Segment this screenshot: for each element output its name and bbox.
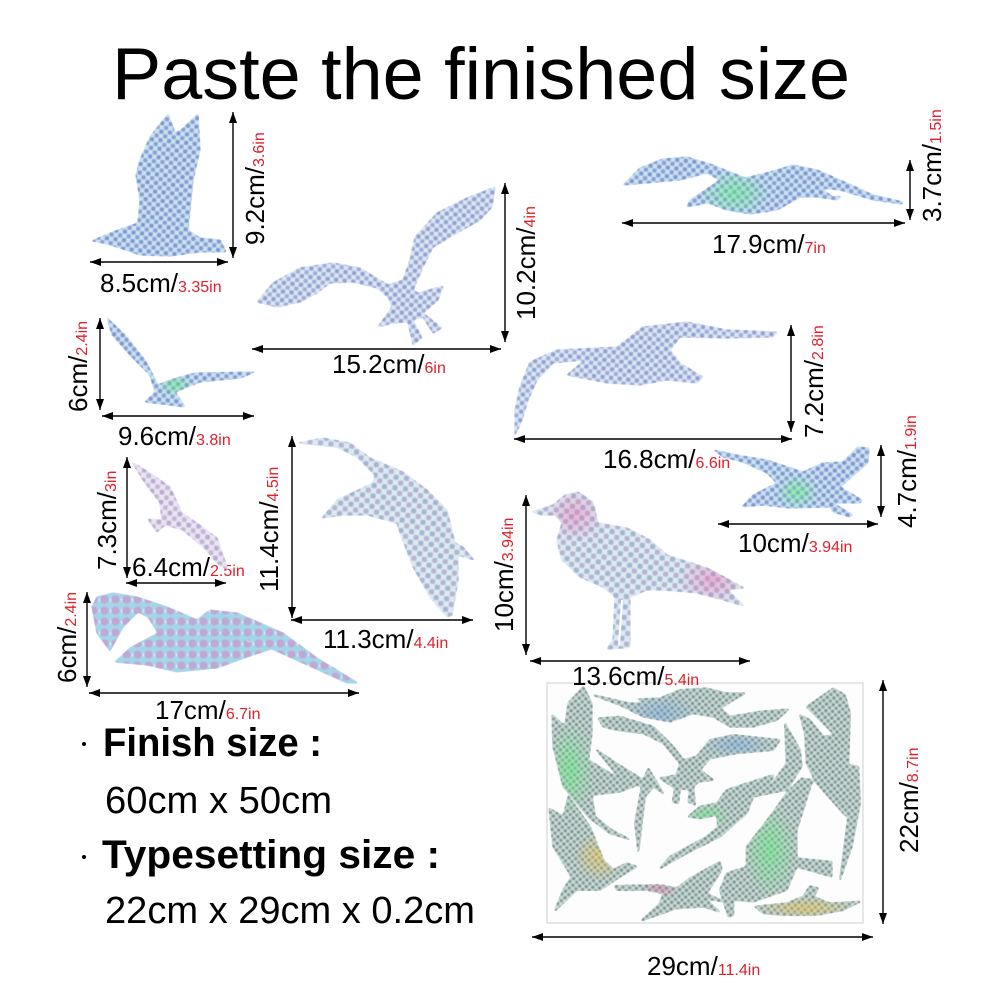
height label: 7.2cm/2.8in [799, 325, 829, 438]
width arrow [89, 692, 359, 694]
typesetting size value: 22cm x 29cm x 0.2cm [105, 890, 475, 932]
panel: sticker 10cm by 4.7cm [714, 415, 922, 558]
finish size value: 60cm x 50cm [105, 780, 332, 822]
text block: typesetting size [82, 833, 475, 932]
bird shape [714, 447, 869, 517]
bird shape [298, 438, 474, 617]
leg gap [619, 600, 622, 645]
green sheen [778, 476, 816, 508]
height arrow [232, 112, 234, 258]
height arrow [291, 436, 293, 618]
pink sheen [550, 493, 740, 600]
bullet [82, 742, 86, 746]
height arrow [99, 318, 101, 410]
width label: 8.5cm/3.35in [100, 268, 222, 298]
width label: 11.3cm/4.4in [323, 624, 448, 654]
height label: 6cm/2.4in [52, 592, 82, 683]
width label: 9.6cm/3.8in [118, 421, 231, 451]
width label: 10cm/3.94in [738, 528, 852, 558]
height label: 4.7cm/1.9in [892, 415, 922, 528]
width arrow [530, 660, 750, 662]
green sheen [160, 376, 190, 396]
height label: 6cm/2.4in [63, 321, 93, 412]
width arrow [291, 619, 473, 621]
width label: 15.2cm/6in [332, 349, 446, 379]
height label: 22cm/8.7in [894, 747, 924, 853]
panel: sticker 9.6cm by 6cm [63, 318, 255, 451]
width arrow [514, 438, 792, 440]
panel: sticker 8.5cm by 9.2cm [90, 112, 270, 298]
width label: 16.8cm/6.6in [603, 444, 730, 474]
height label: 9.2cm/3.6in [240, 132, 270, 245]
height arrow [86, 592, 88, 687]
height arrow [882, 680, 884, 924]
bird shape [257, 187, 495, 345]
height label: 10cm/3.94in [489, 518, 519, 632]
height arrow [909, 160, 911, 220]
width label: 29cm/11.4in [647, 951, 760, 981]
width arrow [532, 936, 873, 938]
bird shape [107, 318, 255, 407]
bullet [82, 855, 86, 859]
width label: 13.6cm/5.4in [572, 661, 699, 691]
sheet backing [547, 683, 863, 923]
width arrow [252, 348, 501, 350]
width label: 17cm/6.7in [155, 695, 261, 725]
panel: standing gull sticker 13.6cm by 10cm [489, 489, 750, 691]
bird shape [92, 114, 226, 256]
panel: sticker 15.2cm by 10.2cm [252, 183, 541, 379]
width arrow [90, 261, 228, 263]
panel: sticker 6.4cm by 7.3cm [92, 457, 245, 583]
bird shape [623, 157, 903, 214]
sheet sheens [547, 693, 857, 920]
height arrow [504, 183, 506, 342]
title: Paste the finished size [112, 34, 850, 115]
height label: 10.2cm/4in [511, 206, 541, 320]
panel: sticker 17cm by 6cm [52, 592, 359, 725]
bird shape [532, 492, 744, 649]
typesetting size heading: Typesetting size : [102, 833, 440, 877]
width arrow [102, 415, 254, 417]
width arrow [126, 582, 226, 584]
panel: sticker 11.3cm by 11.4cm [254, 436, 474, 654]
sheet birds [549, 687, 860, 921]
width label: 17.9cm/7in [712, 229, 826, 259]
panel: sticker 16.8cm by 7.2cm [514, 322, 829, 474]
width arrow [622, 222, 905, 224]
height arrow [126, 457, 128, 578]
height arrow [880, 445, 882, 517]
green sheen [704, 172, 766, 212]
bird shape [515, 322, 777, 435]
height arrow [525, 495, 527, 655]
finish size heading: Finish size : [103, 721, 322, 765]
panel: sticker 17.9cm by 3.7cm [622, 109, 947, 259]
height label: 11.4cm/4.5in [254, 467, 284, 592]
panel: sheet of stickers 29cm by 22cm [532, 680, 924, 981]
height label: 7.3cm/3in [92, 471, 122, 570]
bird shape [132, 462, 228, 570]
width label: 6.4cm/2.5in [132, 552, 245, 582]
height label: 3.7cm/1.5in [917, 109, 947, 222]
text block: finish size [82, 721, 332, 822]
width arrow [718, 523, 878, 525]
bird shape [92, 593, 358, 683]
height arrow [790, 325, 792, 432]
